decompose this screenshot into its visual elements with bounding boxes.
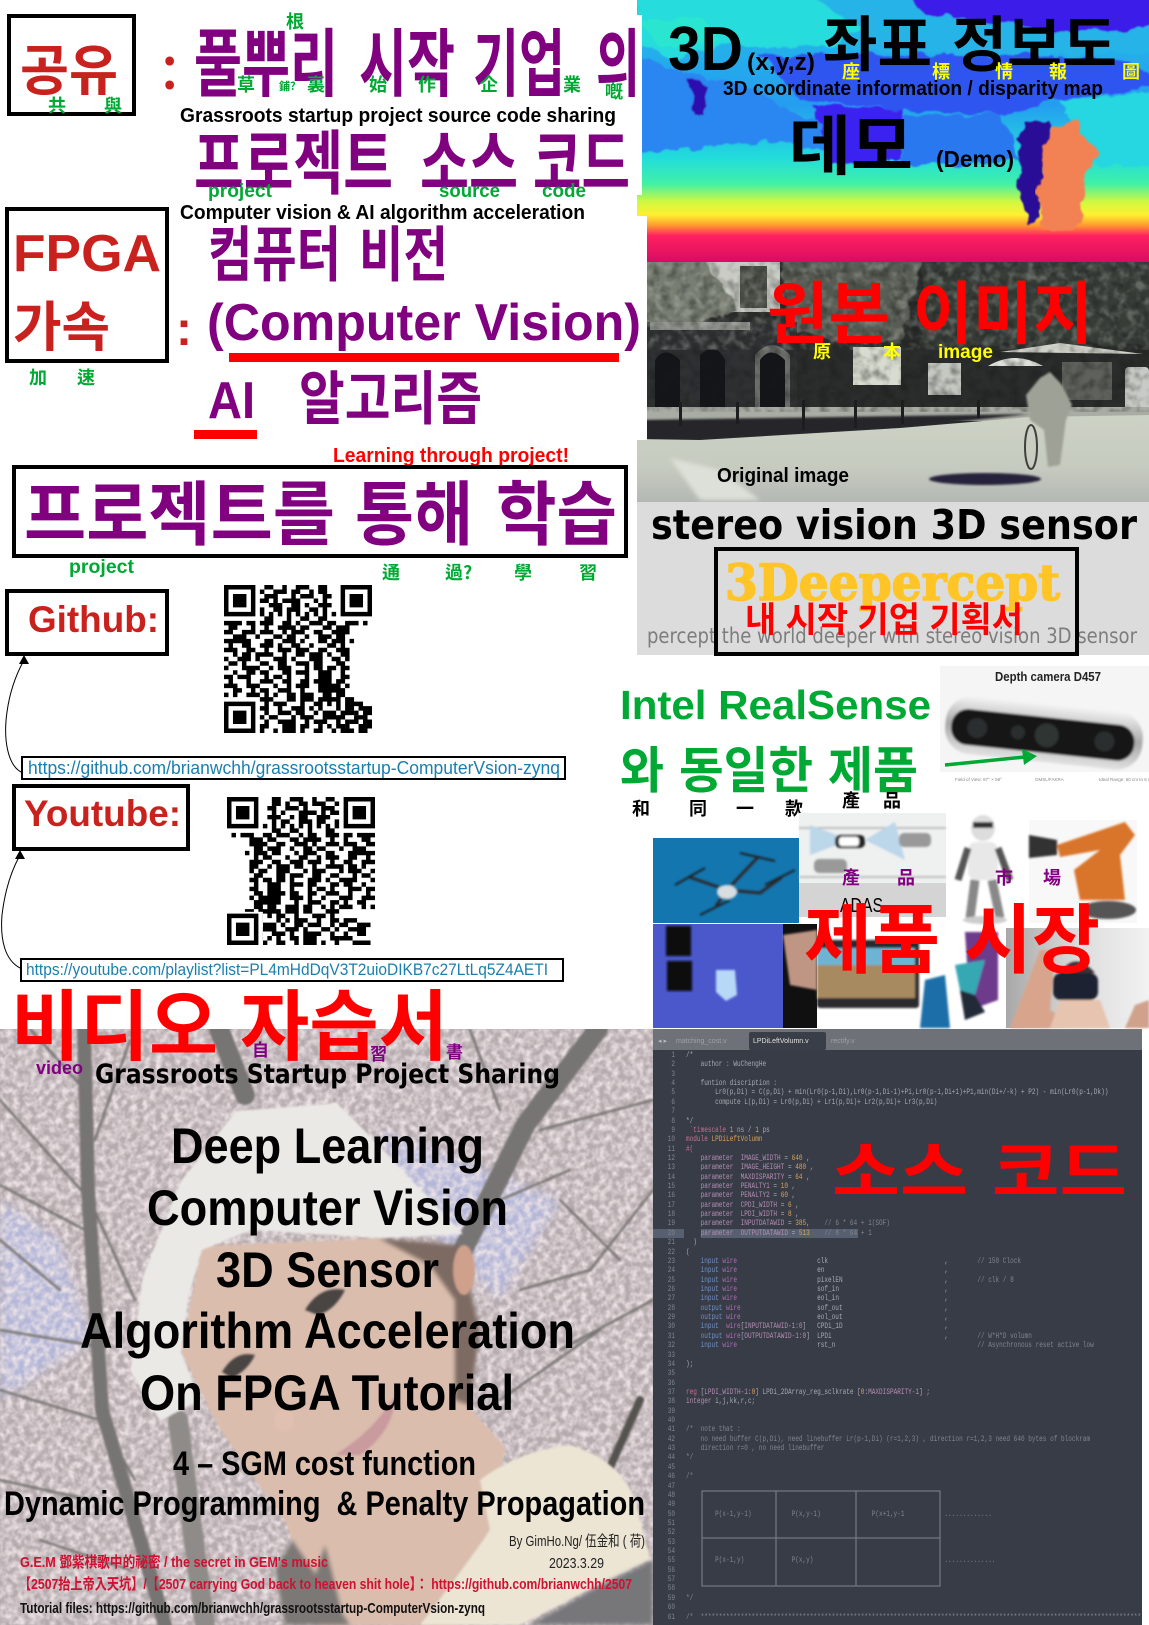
heading: same product: 동일한 — [679, 731, 813, 803]
cap — [130, 1103, 463, 1421]
author and date: 2023.3.29 — [549, 1555, 604, 1572]
glosses: original image: 原 — [813, 338, 831, 364]
image: hand tracking — [653, 924, 817, 1028]
colon: share: : — [162, 37, 177, 106]
word: 3D: 3D — [668, 15, 743, 84]
mouth — [335, 1395, 395, 1455]
hanzi gloss: acceleration: 速 — [77, 364, 95, 390]
heading: source code — [832, 1120, 1127, 1214]
heading: source code: 소스 — [832, 1120, 968, 1214]
subtitle: grassroots: Grassroots startup project source code sharing — [180, 104, 616, 127]
cover title block: Computer Vision — [147, 1180, 508, 1236]
glosses: video tutorial: video — [36, 1058, 83, 1078]
subtitle: computer vision: Computer vision & AI algorithm acceleration — [180, 201, 585, 224]
brand: 3Deepercept: 3Deepercept — [725, 553, 1060, 612]
tab labels — [658, 1038, 855, 1045]
hanzi glosses: grassroots startup: 根 — [286, 8, 304, 34]
english glosses: project source code: code — [542, 181, 586, 202]
glosses: learning through project: 學 — [514, 559, 532, 585]
active tab — [749, 1032, 826, 1050]
cyclist shadow — [929, 473, 1041, 485]
word: share: 공유 — [20, 26, 118, 106]
hanzi glosses: coordinate map: 座 — [842, 58, 860, 84]
hanzi glosses: grassroots startup: 嘅 — [605, 78, 623, 104]
heading: grassroots startup: 풀뿌리 — [194, 5, 338, 112]
word: algorithm: 알고리즘 — [299, 352, 482, 436]
heading: project source code: 코드 — [533, 108, 630, 209]
link: youtube url: https://youtube.com/playlist?list=PL4mHdDqV3T2uioDIKB7c27LtLq5Z4AETI — [26, 961, 548, 979]
words: 학습 — [496, 459, 617, 560]
hanzi gloss: 與 — [104, 92, 122, 118]
arrow: product to camera — [945, 749, 1037, 765]
camera body — [943, 694, 1145, 772]
heading: original image — [767, 259, 1093, 358]
heading: original image: 원본 — [767, 259, 890, 358]
heading: grassroots startup: 시작 — [359, 5, 455, 112]
glosses: video tutorial: 書 — [446, 1038, 463, 1063]
heading: computer vision korean: 비전 — [359, 207, 448, 294]
hanzi glosses: grassroots startup: 草 — [237, 71, 255, 97]
heading: computer vision english: (Computer Vision) — [207, 294, 641, 352]
image: motion game — [817, 932, 998, 1028]
heading: demo: 데모 — [789, 94, 913, 188]
colon: FPGA: : — [176, 303, 192, 356]
heading: grassroots startup: 기업 — [473, 5, 565, 112]
hanzi glosses: grassroots startup: 業 — [563, 71, 581, 97]
tab labels: rectify.v — [831, 1038, 855, 1045]
word: FPGA: FPGA — [13, 225, 161, 283]
hanzi gloss: acceleration — [29, 364, 95, 390]
link: github url: https://github.com/brianwchh/grassrootsstartup-ComputerVsion-zynq — [28, 758, 560, 778]
cover subtitle: Dynamic Programming & Penalty Propagation — [4, 1485, 645, 1523]
hanzi glosses: grassroots startup: 作 — [418, 71, 436, 97]
hanzi glosses: grassroots startup: 企 — [480, 71, 498, 97]
heading: video tutorial: 비디오 — [11, 966, 218, 1077]
hanzi glosses: grassroots startup: 鋪? — [279, 78, 296, 94]
heading: share — [9, 16, 134, 118]
hanzi glosses: product market: 產 — [842, 864, 860, 890]
underline: computer vision — [229, 353, 619, 362]
word: acceleration: 가속 — [13, 283, 110, 362]
word: xyz: (x,y,z) — [747, 49, 815, 76]
heading: project source code — [194, 108, 630, 209]
line numbers: 1 2 3 4 5 6 7 8 9 10 11 12 13 14 15 16 17 18 19 20 21 22 23 24 25 26 27 28 29 30 31 32 33 34 35 36 37 38 39 40 41 42 43 44 45 46 47 48 49 50 51 52 53 54 55 56 57 58 59 60 61 — [668, 1051, 675, 1622]
hanzi glosses: same product: 和 — [632, 795, 650, 821]
hanzi glosses: same product: 一 — [736, 795, 754, 821]
heading: same product: 와 — [620, 731, 664, 803]
label: youtube — [14, 786, 188, 849]
glosses: learning through project: 通 — [382, 559, 400, 585]
panel: video tutorial cover photo — [0, 1029, 653, 1625]
arrow: github link to label — [6, 655, 29, 772]
camera specs — [955, 777, 1149, 782]
author and date: By GimHo.Ng/ 伍金和 ( 荷) — [509, 1533, 645, 1550]
korean plan title: 내 시작 기업 기획서 — [745, 592, 1023, 643]
glosses: learning through project: 習 — [579, 559, 597, 585]
arrow: youtube link to label — [2, 850, 25, 968]
heading: demo — [789, 94, 1014, 188]
hanzi glosses: same product: 產 — [842, 787, 860, 813]
glosses: learning through project: project — [69, 557, 135, 578]
heading: same product — [620, 731, 918, 803]
cover subtitle — [4, 1445, 645, 1523]
label: github: Github: — [28, 599, 159, 640]
label: youtube: Youtube: — [24, 793, 181, 834]
cover title block: 3D Sensor — [216, 1242, 439, 1298]
glosses: original image — [813, 338, 993, 364]
hanzi glosses: coordinate map: 標 — [932, 58, 950, 84]
camera specs: GMSL/FAKRA — [1035, 777, 1064, 782]
hanzi glosses: product market — [842, 864, 1061, 890]
hanzi glosses: same product: 品 — [883, 787, 901, 813]
glosses: learning through project: 過? — [445, 559, 472, 585]
heading: grassroots startup: 의 — [596, 5, 640, 112]
qr code: github — [224, 585, 372, 733]
hanzi glosses: coordinate map: 情 — [995, 58, 1013, 84]
word: AI: AI — [208, 372, 255, 430]
hanzi glosses: coordinate map: 報 — [1049, 58, 1067, 84]
cover title block — [80, 1118, 575, 1421]
panel: disparity map demo — [637, 0, 1149, 262]
cover subtitle: 4 – SGM cost function — [173, 1445, 476, 1483]
hanzi glosses: product market: 市 — [995, 864, 1013, 890]
bollards — [679, 400, 980, 430]
glosses: video tutorial: 習 — [370, 1040, 387, 1065]
cover credit lines: G.E.M 鄧紫棋歌中的祕密 / the secret in GEM's music — [20, 1553, 328, 1571]
heading: 3D coordinate map — [668, 0, 1117, 84]
cyclist — [1026, 372, 1072, 467]
hanzi gloss: 共 — [48, 92, 66, 118]
hanzi gloss — [48, 92, 122, 118]
caption: original image: Original image — [717, 465, 849, 487]
camera label: Depth camera D457 — [995, 669, 1101, 684]
words: 프로젝트를 — [24, 459, 335, 560]
cover credit lines: Tutorial files: https://github.com/brianwchh/grassrootsstartup-ComputerVsion-zynq — [20, 1600, 485, 1617]
hanzi glosses: coordinate map — [842, 58, 1140, 84]
hair — [379, 1238, 480, 1405]
heading: source code: 코드 — [992, 1120, 1127, 1214]
glosses: video tutorial — [36, 1036, 463, 1078]
eyes — [222, 1289, 345, 1378]
heading: product market — [804, 879, 1100, 989]
cover credit lines: 【2507抬上帝入天坑】/【2507 carrying God back to heaven shit hole】： https://github.com/brianwchh/2507 — [19, 1575, 632, 1593]
heading: demo: (Demo) — [936, 146, 1014, 172]
underline: AI — [194, 430, 257, 439]
heading: video tutorial: 자습서 — [240, 966, 448, 1077]
heading: product market: 시장 — [964, 879, 1100, 989]
tab labels: matching_cost.v — [676, 1038, 727, 1045]
english glosses: project source code — [208, 181, 586, 202]
heading: video tutorial — [11, 966, 448, 1077]
box — [7, 209, 167, 361]
hanzi glosses: grassroots startup: 裏 — [307, 71, 325, 97]
text: ADAS: ADAS — [840, 895, 883, 917]
box — [14, 467, 626, 556]
heading: AI algorithm — [194, 352, 482, 439]
english glosses: project source code: project — [208, 181, 273, 202]
white strips beside right images — [637, 15, 647, 440]
heading: computer vision korean — [208, 207, 448, 294]
heading: computer vision korean: 컴퓨터 — [208, 207, 341, 294]
nostril — [274, 1408, 294, 1432]
image: VR headset — [1006, 928, 1149, 1028]
fur collar — [420, 1445, 650, 1625]
tab labels: ◂ ▸ — [658, 1038, 667, 1045]
cover title block: Algorithm Acceleration — [80, 1303, 575, 1359]
qr code: youtube — [227, 797, 375, 945]
caption: learning through project: Learning through project! — [333, 445, 569, 467]
image: depth camera D457 — [940, 666, 1149, 782]
glosses: original image: 本 — [883, 338, 901, 364]
panel: original street image — [637, 255, 1149, 502]
hanzi glosses: same product: 款 — [785, 795, 803, 821]
camera specs: Field of View: 87° × 58° — [955, 777, 1002, 782]
box — [9, 16, 134, 114]
glosses: original image: image — [938, 342, 993, 363]
subtitle: disparity map: 3D coordinate information / disparity map — [723, 78, 1103, 100]
sweater — [275, 1540, 350, 1625]
hanzi gloss: acceleration: 加 — [29, 364, 47, 390]
heading: grassroots startup — [194, 5, 640, 112]
cover title: grassroots sharing: Grassroots Startup Project Sharing — [95, 1059, 560, 1090]
panel: source code editor — [640, 1029, 1142, 1625]
heading: project source code: 프로젝트 — [194, 108, 393, 209]
current line highlight — [653, 1229, 858, 1238]
heading: FPGA acceleration — [7, 209, 167, 362]
hanzi glosses: coordinate map: 圖 — [1122, 58, 1140, 84]
glosses: learning through project — [69, 557, 597, 585]
hanzi glosses: product market: 品 — [897, 864, 915, 890]
hanzi glosses: grassroots startup — [237, 8, 623, 104]
heading: same product: 제품 — [828, 731, 918, 803]
face — [181, 1238, 505, 1625]
cover title block: Deep Learning — [171, 1118, 484, 1174]
hanzi glosses: grassroots startup: 始 — [369, 71, 387, 97]
cover credit lines — [19, 1553, 632, 1617]
white right margin beside code — [1142, 1029, 1149, 1625]
heading: project source code: 소스 — [420, 108, 518, 209]
image: drone — [653, 838, 799, 923]
panel: stereo vision sensor — [637, 502, 1149, 655]
image: robot arm — [1029, 820, 1137, 923]
label: github — [7, 591, 167, 654]
hanzi glosses: product market: 場 — [1043, 864, 1061, 890]
box: 3Deepercept business plan — [716, 549, 1077, 654]
heading: learning through project — [14, 459, 626, 560]
table in code comment — [702, 1491, 940, 1586]
image: humanoid robot — [958, 815, 1010, 924]
hanzi glosses: same product — [632, 787, 901, 821]
image: ADAS — [799, 813, 946, 917]
words — [24, 459, 617, 560]
heading: original image: 이미지 — [913, 259, 1093, 358]
dark lower corner — [530, 1560, 653, 1625]
hanzi glosses: same product: 同 — [689, 795, 707, 821]
heading: product market: 제품 — [804, 879, 940, 989]
english glosses: project source code: source — [439, 181, 500, 202]
cover title block: On FPGA Tutorial — [140, 1365, 514, 1421]
disparity map: person — [1038, 121, 1097, 232]
author and date — [509, 1533, 645, 1572]
disparity map: person shadow — [1014, 120, 1052, 222]
heading: Intel RealSense: Intel RealSense — [620, 682, 931, 728]
tab labels: LPDiLeftVolumn.v — [753, 1038, 809, 1045]
words: 통해 — [355, 459, 473, 560]
glosses: video tutorial: 自 — [252, 1036, 269, 1061]
ear — [453, 1245, 475, 1295]
